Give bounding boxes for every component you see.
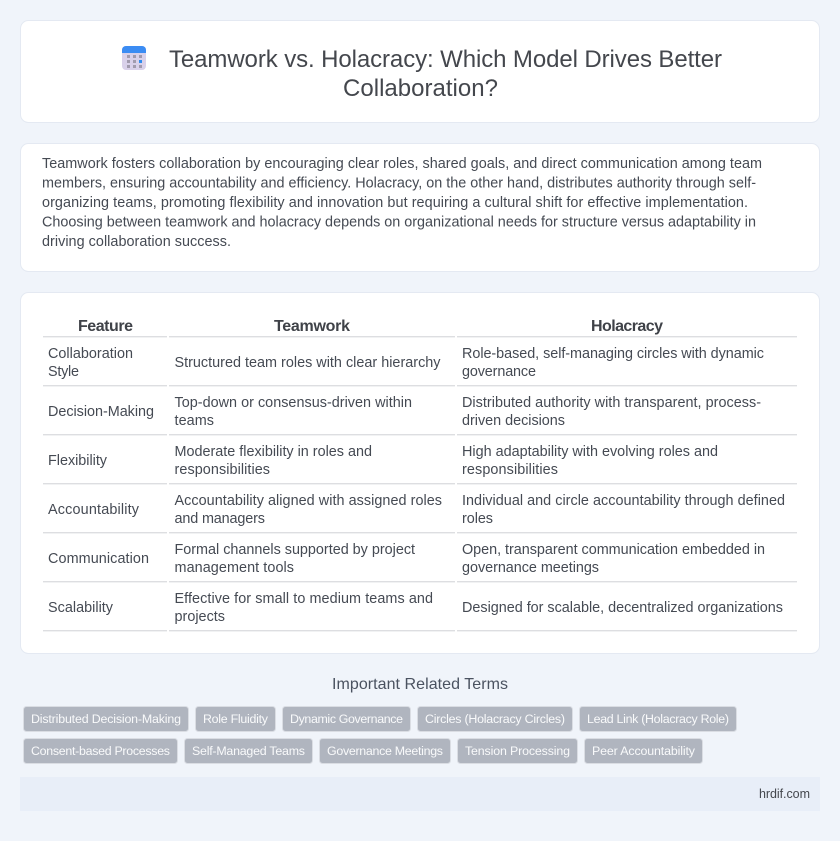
- row: scalability: Effective for small to medium teams and: [174, 591, 433, 607]
- intro paragraph: driving collaboration success.: [42, 234, 231, 250]
- table header: Teamwork: [274, 318, 350, 335]
- row: decision-making: [48, 395, 761, 429]
- panel: introduction text: [20, 144, 820, 272]
- row: accountability: and managers: [174, 511, 265, 527]
- row: accountability: Accountability aligned with assigned roles: [174, 493, 442, 509]
- row: accountability: [48, 493, 785, 527]
- row: scalability: Designed for scalable, decentralized organizations: [462, 600, 783, 616]
- intro paragraph: Teamwork fosters collaboration by encouraging clear roles, shared goals, and direct communication among team: [42, 156, 762, 172]
- row: scalability: projects: [174, 609, 225, 625]
- title: Collaboration?: [343, 75, 498, 102]
- tag: Self-Managed Teams: [192, 744, 305, 758]
- row: communication: management tools: [174, 560, 294, 576]
- tag: [196, 706, 276, 732]
- intro paragraph: members, ensuring accountability and efficiency. Holacracy, on the other hand, distributes authority through self-: [42, 176, 756, 192]
- icon: calendar: [122, 46, 146, 70]
- row: communication: Formal channels supported by project: [174, 542, 415, 558]
- table header: Feature: [78, 318, 133, 335]
- row: collaboration style: Structured team roles with clear hierarchy: [174, 355, 441, 371]
- row: communication: [48, 542, 765, 576]
- tag: Tension Processing: [465, 744, 570, 758]
- table header: [78, 318, 663, 335]
- row: communication: governance meetings: [462, 560, 599, 576]
- row: decision-making: Top-down or consensus-driven within: [174, 395, 412, 411]
- row: decision-making: driven decisions: [462, 413, 565, 429]
- tag: Dynamic Governance: [290, 712, 403, 726]
- row: collaboration style: Role-based, self-managing circles with dynamic: [462, 346, 764, 362]
- footer: [20, 777, 820, 811]
- tag: Consent-based Processes: [31, 744, 170, 758]
- row: communication: Communication: [48, 551, 149, 567]
- row: collaboration style: [48, 346, 764, 380]
- table header: Holacracy: [591, 318, 663, 335]
- tag: [184, 738, 312, 764]
- tag: Distributed Decision-Making: [31, 712, 181, 726]
- row: decision-making: Decision-Making: [48, 404, 154, 420]
- row: flexibility: High adaptability with evolving roles and: [462, 444, 718, 460]
- row: scalability: [48, 591, 783, 625]
- row: collaboration style: Style: [48, 364, 79, 380]
- tag: [584, 738, 702, 764]
- tag: [458, 738, 578, 764]
- row: accountability: roles: [462, 511, 493, 527]
- intro paragraph: [42, 156, 762, 250]
- heading: important related terms: Important Related Terms: [332, 676, 508, 693]
- row: collaboration style: Collaboration: [48, 346, 133, 362]
- row: accountability: Individual and circle accountability through defined: [462, 493, 785, 509]
- tag: [282, 706, 410, 732]
- row: decision-making: teams: [174, 413, 214, 429]
- row: communication: Open, transparent communication embedded in: [462, 542, 765, 558]
- intro paragraph: organizing teams, promoting flexibility and innovation but requiring a cultural shift for effective implementation.: [42, 195, 748, 211]
- row: decision-making: Distributed authority with transparent, process-: [462, 395, 761, 411]
- intro paragraph: Choosing between teamwork and holacracy depends on organizational needs for structure versus adaptability in: [42, 214, 756, 230]
- tag: [418, 706, 572, 732]
- row: flexibility: [48, 444, 718, 478]
- tag: Governance Meetings: [327, 744, 443, 758]
- tag: [580, 706, 736, 732]
- row: scalability: Scalability: [48, 600, 114, 616]
- panel: title card: [20, 20, 820, 122]
- title: Teamwork vs. Holacracy: Which Model Drives Better: [169, 46, 722, 73]
- tag: Peer Accountability: [592, 744, 696, 758]
- tag: Circles (Holacracy Circles): [425, 712, 565, 726]
- tag: [320, 738, 450, 764]
- row: flexibility: responsibilities: [174, 462, 270, 478]
- row: collaboration style: governance: [462, 364, 536, 380]
- tag: [24, 706, 188, 732]
- row: flexibility: responsibilities: [462, 462, 558, 478]
- panel: related term tags: [24, 706, 736, 764]
- panel: comparison table: [20, 292, 820, 654]
- tag: [24, 738, 178, 764]
- row: flexibility: Flexibility: [48, 453, 108, 469]
- tag: Role Fluidity: [203, 712, 269, 726]
- footer: hrdif.com: [759, 787, 810, 801]
- row: flexibility: Moderate flexibility in roles and: [174, 444, 372, 460]
- row: accountability: Accountability: [48, 502, 140, 518]
- title: [169, 46, 722, 102]
- tag: Lead Link (Holacracy Role): [587, 712, 729, 726]
